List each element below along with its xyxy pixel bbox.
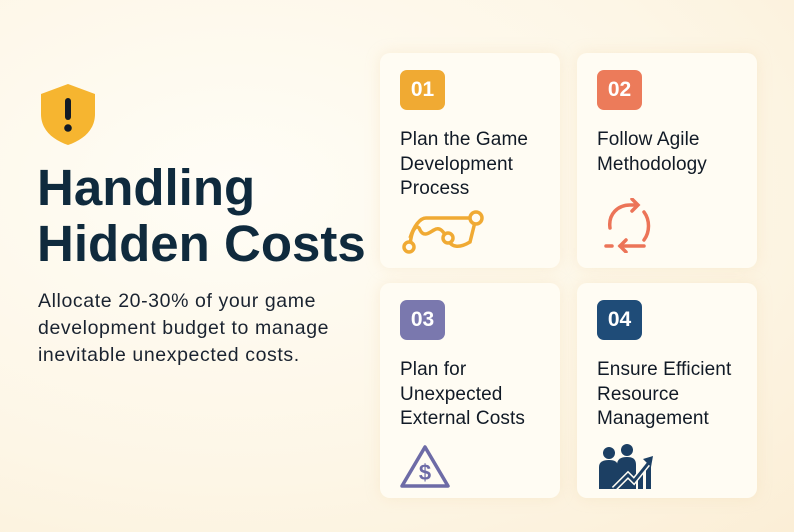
card title 01: Development [400, 154, 513, 174]
subtitle [38, 290, 329, 366]
title: Handling [37, 159, 255, 216]
card title 04: Ensure Efficient [597, 359, 731, 380]
badge 04 [597, 300, 642, 340]
badge 03: 03 [411, 308, 434, 331]
card title 03: Unexpected [400, 384, 502, 404]
title [37, 159, 366, 272]
card title 04: Management [597, 408, 709, 429]
badge 02 [597, 70, 642, 110]
icon: dollar warning [400, 445, 450, 488]
icon: team growth [599, 444, 653, 489]
card title 03: External Costs [400, 408, 525, 429]
card title 01: Process [400, 178, 469, 199]
badge 01: 01 [411, 78, 434, 101]
badge 03 [400, 300, 445, 340]
icon: path [402, 210, 484, 254]
card title 02: Methodology [597, 154, 707, 174]
icon: shield warning [41, 84, 95, 145]
panel: card 01 [380, 53, 560, 268]
panel: card 03 [380, 283, 560, 498]
badge 02: 02 [608, 78, 631, 101]
badge 04: 04 [608, 308, 631, 331]
card title 04: Resource [597, 384, 679, 404]
card title 02: Follow Agile [597, 129, 700, 150]
card title 01: Plan the Game [400, 129, 528, 150]
title: Hidden Costs [37, 215, 366, 272]
badge 01 [400, 70, 445, 110]
subtitle: Allocate 20-30% of your game [38, 290, 316, 312]
subtitle: development budget to manage [38, 317, 329, 339]
card title 03: Plan for [400, 359, 466, 380]
card title 01 [400, 129, 528, 199]
panel: card 02 [577, 53, 757, 268]
card title 02 [597, 129, 707, 174]
card title 03 [400, 359, 525, 429]
icon: cycle [604, 198, 650, 253]
icon: dollar warning: $ [419, 460, 431, 485]
panel: card 04 [577, 283, 757, 498]
card title 04 [597, 359, 732, 429]
subtitle: inevitable unexpected costs. [38, 344, 300, 366]
